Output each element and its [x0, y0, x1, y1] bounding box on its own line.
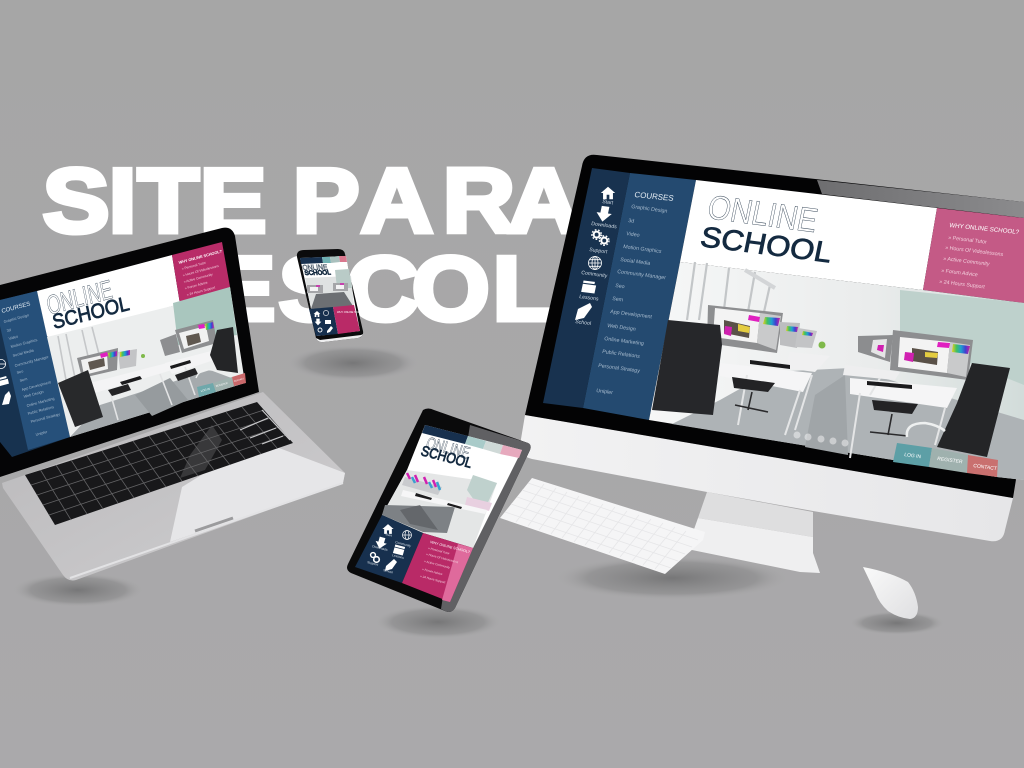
monitor screen: [543, 168, 1024, 480]
panel: icon sidebar: [543, 168, 630, 408]
desk monitors middle: [780, 322, 893, 362]
monitor chin: [520, 415, 1013, 541]
courses list text: Social Media: [620, 257, 651, 267]
shadow: keyboard and stand: [554, 556, 790, 600]
shadow: tablet: [374, 605, 502, 639]
icon: folder: [581, 280, 597, 294]
mouse: [863, 567, 918, 619]
tablet pink text: WHY ONLINE SCHOOL?: [430, 540, 470, 554]
laptop notch: [195, 518, 233, 531]
laptop courses text: Seo: [16, 369, 24, 375]
laptop front edge: [70, 483, 343, 578]
laptop palm reflection: [170, 440, 345, 542]
courses list text: Unipler: [596, 388, 614, 396]
laptop classroom photo: [47, 287, 245, 437]
why online school text: » Active Community: [943, 256, 990, 268]
laptop courses text: COURSES: [1, 301, 31, 315]
why online school text: » 24 Hours Support: [939, 279, 986, 291]
laptop courses text: App Development: [21, 380, 52, 392]
tablet icon labels: Support: [367, 560, 379, 567]
laptop buttons: REGISTER: [216, 382, 228, 388]
heading: online school: [698, 189, 835, 269]
sidebar labels: School: [575, 319, 592, 327]
phone pink panel: [333, 305, 360, 334]
keyboard: [500, 478, 705, 574]
slider dots: [794, 432, 848, 446]
laptop courses panel: [0, 291, 70, 450]
chair right: [937, 363, 1010, 457]
tablet pink text: » Personal Tutor: [428, 546, 450, 555]
tablet pink text: » 24 Hours Support: [420, 574, 446, 584]
laptop pink text: [178, 248, 223, 297]
laptop pink text: » Forum Advice: [184, 280, 208, 290]
tablet body: [347, 408, 531, 612]
courses list text: Public Relations: [602, 349, 641, 360]
laptop screen: [0, 242, 246, 457]
courses list text: Motion Graphics: [623, 244, 662, 255]
laptop courses text: Personal Strategy: [30, 412, 60, 424]
tablet pink panel: [402, 533, 473, 602]
bezel reflection: [817, 180, 1024, 218]
desktop monitor: [520, 155, 1024, 573]
laptop icon sidebar: [0, 291, 70, 457]
icon: globe: [588, 256, 602, 270]
button: contact: CONTACT: [973, 463, 997, 472]
laptop: [0, 228, 345, 580]
laptop sidebar icons: [0, 359, 11, 405]
courses list text: Web Design: [607, 323, 636, 333]
sidebar labels: [575, 199, 618, 327]
laptop courses text: Unipler: [35, 430, 49, 437]
sidebar labels: Support: [589, 247, 608, 255]
phone icons: [314, 310, 333, 333]
icon: pencil: [575, 303, 592, 320]
monitor stand: [687, 492, 820, 573]
laptop pink text: » Hours Of Videolessons: [182, 264, 220, 277]
laptop courses text: Video: [8, 335, 19, 341]
courses list text: Personal Strategy: [598, 363, 641, 374]
laptop pink panel: [172, 242, 230, 304]
laptop courses text: Sem: [19, 377, 28, 383]
shadow: laptop: [12, 573, 144, 607]
phone: [297, 249, 367, 342]
courses list text: COURSES: [634, 190, 675, 203]
laptop heading: ONLINE: [44, 274, 115, 321]
phone photo: [305, 269, 354, 309]
laptop courses text: 3d: [6, 328, 11, 333]
tablet icon labels: School: [383, 568, 394, 574]
button: register: REGISTER: [937, 456, 963, 465]
laptop courses text: Public Relations: [27, 405, 55, 416]
tablet pink text: » Forum Advice: [422, 567, 443, 576]
tablet pink text: » Active Community: [424, 559, 451, 570]
phone navy panel: [309, 307, 338, 336]
courses list text: App Development: [610, 309, 653, 320]
tablet pink reflection: [442, 544, 473, 602]
button: register: [929, 448, 968, 473]
sidebar labels: Community: [581, 270, 608, 279]
laptop heading: SCHOOL: [51, 293, 131, 334]
tablet icons: [371, 524, 412, 571]
sidebar labels: Start: [602, 199, 614, 206]
laptop desk monitor right: [175, 320, 217, 353]
tablet heading: ONLINE: [424, 434, 472, 463]
laptop pink text: » 24 Hours Support: [186, 285, 216, 297]
courses list text: 3d: [628, 218, 635, 225]
tablet bezel reflection: [441, 425, 531, 612]
laptop desk monitor left: [77, 348, 118, 378]
courses list text: [596, 190, 675, 396]
laptop keyboard: [25, 402, 293, 525]
sidebar icons: [575, 187, 615, 320]
tablet icon labels: Downloads: [372, 544, 389, 552]
chair left: [652, 320, 722, 415]
phone heading: ONLINE: [302, 263, 328, 272]
laptop courses text: Graphic Design: [3, 313, 29, 324]
shadow: phone: [287, 345, 419, 381]
tablet icon labels: Start: [385, 532, 393, 538]
white header: [680, 180, 937, 290]
tablet icon labels: Community: [395, 540, 412, 548]
shadow: mouse: [849, 611, 945, 635]
title: SITE PARA: [43, 150, 580, 252]
icon: home: [601, 187, 615, 199]
laptop heading: [44, 274, 131, 334]
courses list text: Community Manager: [617, 269, 667, 281]
heading: online school: SCHOOL: [698, 221, 835, 269]
laptop buttons: [197, 373, 246, 397]
sidebar labels: Downloads: [591, 221, 618, 230]
laptop courses text: Social Media: [12, 348, 35, 358]
tablet navy panel: [355, 515, 423, 583]
icon: gears: [592, 230, 609, 245]
laptop buttons: LOG IN: [200, 387, 210, 393]
laptop pink text: » Personal Tutor: [181, 260, 207, 271]
laptop pink text: WHY ONLINE SCHOOL?: [178, 248, 223, 265]
laptop pink text: » Active Community: [183, 272, 213, 284]
why online school text: » Hours Of Videolessons: [945, 245, 1004, 258]
tablet icon labels: Lessons: [392, 553, 405, 560]
icon: download: [595, 205, 613, 223]
tablet icon labels: [367, 532, 412, 574]
laptop courses text: Online Marketing: [26, 397, 55, 408]
tablet top bar: [422, 425, 522, 458]
laptop desk monitor mid: [118, 334, 180, 369]
why online school text: » Personal Tutor: [948, 235, 987, 246]
panel: why online school: [923, 208, 1024, 303]
courses list text: Graphic Design: [631, 204, 668, 215]
why online school text: [939, 222, 1020, 291]
courses list text: Online Marketing: [604, 336, 644, 347]
phone body: [297, 249, 363, 342]
desk monitor left: [707, 305, 783, 353]
button: log in: [893, 443, 932, 467]
laptop chair right: [210, 327, 238, 373]
phone pink text: WHY ONLINE SCHOOL?: [337, 310, 367, 314]
laptop courses text: Community Manager: [14, 355, 50, 368]
panel: courses list: [583, 173, 696, 420]
classroom photo: [649, 262, 1024, 480]
tablet heading: [419, 434, 474, 472]
sidebar labels: Lessons: [579, 294, 599, 303]
phone heading: SCHOOL: [304, 270, 332, 277]
heading: online school: ONLINE: [704, 189, 821, 240]
phone silver edge: [316, 334, 363, 342]
laptop lid: [0, 228, 259, 477]
button: log in: LOG IN: [904, 452, 922, 460]
laptop courses text: Web Design: [23, 390, 44, 399]
phone screen: [300, 256, 367, 336]
desk monitor right: [890, 330, 973, 380]
tablet screen: [355, 425, 522, 602]
courses list text: Video: [626, 231, 640, 239]
phone heading: [302, 263, 332, 277]
title: ESCOLA: [209, 238, 644, 340]
tablet heading: SCHOOL: [419, 444, 474, 472]
tablet: [347, 408, 531, 612]
why online school text: WHY ONLINE SCHOOL?: [949, 222, 1020, 236]
button: contact: [967, 455, 998, 477]
laptop courses text: [1, 301, 60, 437]
tablet pink text: » Hours Of Videolessons: [426, 552, 459, 564]
why online school text: » Forum Advice: [941, 268, 978, 278]
monitor bezel: [525, 155, 1024, 498]
title: [43, 150, 644, 340]
courses list text: Seo: [615, 283, 625, 290]
courses list text: Sem: [612, 296, 624, 303]
laptop base: [2, 392, 345, 580]
laptop courses text: Motion Graphics: [10, 338, 38, 349]
tablet pink text: [420, 540, 470, 584]
laptop chair left: [58, 370, 103, 427]
laptop white header: [37, 255, 180, 340]
tablet photo: [382, 470, 497, 548]
laptop buttons: CONTACT: [234, 377, 245, 383]
